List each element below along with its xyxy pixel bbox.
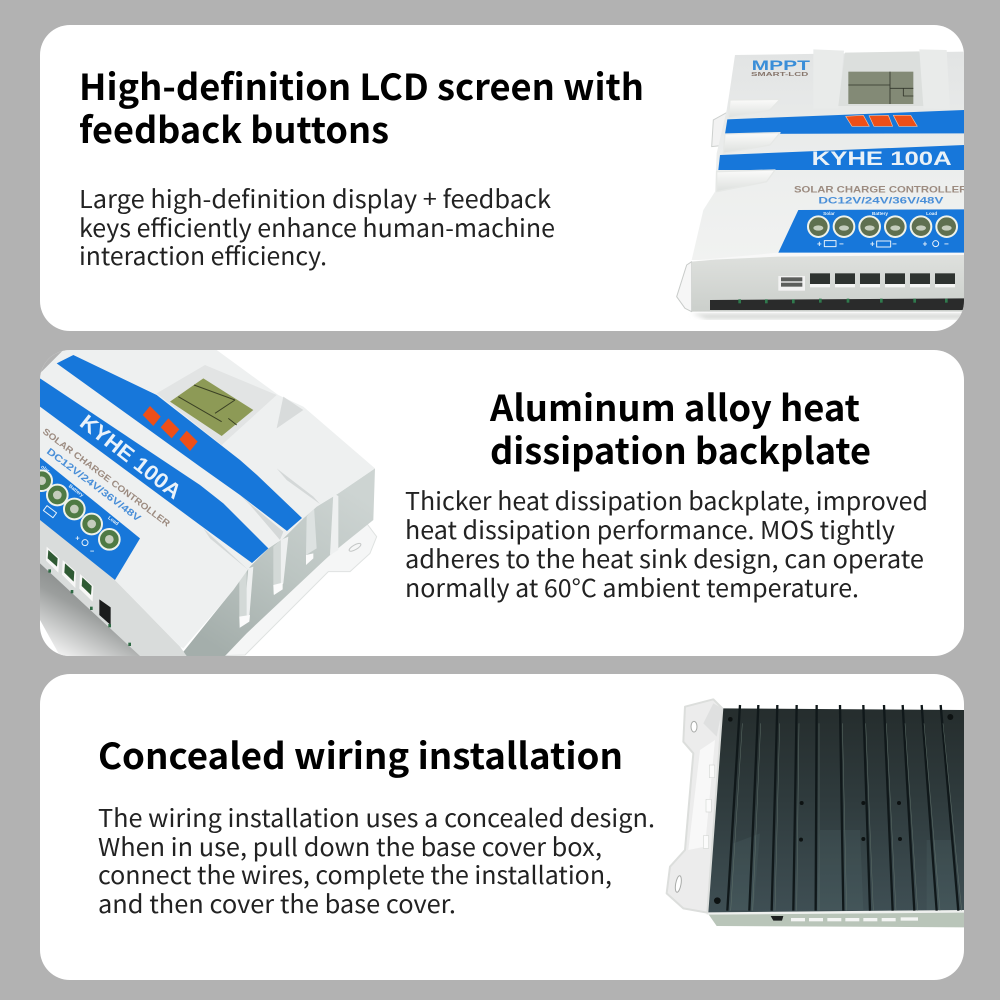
terminal panel: Battery: [872, 211, 888, 216]
orange buttons: [143, 406, 198, 451]
terminal panel: Battery: [67, 483, 85, 499]
terminal panel: olar: [39, 464, 50, 474]
logo: MPPT: [752, 57, 811, 73]
text block: heat description: heat dissipation performance. MOS tightly: [405, 512, 895, 547]
blue band lower: [718, 145, 965, 170]
text block: LCD description: Large high-definition display + feedback: [79, 181, 551, 216]
terminal panel: +: [75, 534, 80, 543]
blue band lower: [40, 378, 268, 563]
text block: heat description: normally at 60°C ambient temperature.: [405, 570, 859, 605]
port face: [40, 518, 187, 656]
terminal panel: [31, 457, 140, 580]
heading: LCD screen: feedback buttons: [79, 102, 389, 154]
terminal panel: Load: [926, 211, 937, 216]
shadow under port face: [40, 560, 143, 656]
mounting flange: [225, 524, 378, 656]
product label: DC12V/24V/36V/48V: [44, 446, 143, 525]
keyhole: [348, 542, 362, 552]
terminal panel: +: [923, 239, 928, 248]
panel: concealed wiring: [40, 674, 965, 980]
blue band upper: [57, 355, 302, 531]
product label: SOLAR CHARGE CONTROLLER: [41, 426, 172, 529]
model name: KYHE 100A: [75, 410, 186, 504]
terminal panel: −: [839, 239, 844, 248]
ports row: [46, 547, 131, 646]
product label: [794, 186, 964, 204]
LCD bezel and display: [157, 365, 277, 445]
text block: LCD description: keys efficiently enhance human-machine: [79, 210, 555, 245]
blue band upper: [725, 110, 965, 134]
terminal panel: Load: [106, 515, 120, 527]
heading: heat dissipation: Aluminum alloy heat: [489, 380, 860, 432]
terminal panel: −: [892, 239, 897, 248]
text block: wiring description: When in use, pull down the base cover box,: [98, 829, 602, 864]
bottom edge with slots: [707, 910, 965, 927]
heading: LCD screen: High-definition LCD screen with: [79, 59, 644, 111]
text block: LCD description: [79, 181, 555, 273]
screw holes: [714, 714, 953, 904]
text block: wiring description: [98, 800, 655, 921]
heat sink fins: [727, 705, 962, 911]
logo: SMART-LCD: [751, 72, 808, 78]
text block: wiring description: The wiring installation uses a concealed design.: [98, 800, 655, 835]
heading: heat dissipation: dissipation backplate: [490, 423, 871, 475]
terminal panel: +: [870, 239, 875, 248]
heat sink plate: [707, 708, 965, 912]
heading: heat dissipation: [489, 380, 871, 475]
ports row: [778, 273, 955, 291]
text block: LCD description: interaction efficiency.: [79, 238, 327, 273]
product label: DC12V/24V/36V/48V: [818, 196, 944, 206]
text block: heat description: adheres to the heat sink design, can operate: [405, 541, 924, 576]
terminal panel: +: [817, 239, 822, 248]
heading: concealed wiring: Concealed wiring installation: [98, 728, 623, 780]
LCD bezel and display: [838, 51, 923, 106]
heading: LCD screen: [79, 59, 644, 154]
model name: KYHE 100A: [812, 149, 952, 170]
text block: wiring description: and then cover the base cover.: [98, 886, 456, 921]
terminal panel: [778, 209, 965, 253]
terminal panel: −: [90, 546, 94, 555]
text block: heat description: Thicker heat dissipation backplate, improved: [405, 483, 928, 518]
logo: [751, 60, 810, 76]
product label: SOLAR CHARGE CONTROLLER: [794, 184, 968, 194]
product image: controller front view: [677, 49, 968, 319]
panel: heat dissipation: [31, 350, 964, 656]
panel: LCD screen: [40, 25, 968, 331]
terminal panel: Solar: [823, 211, 835, 216]
terminal panel: −: [944, 239, 949, 248]
product image: controller angled view: [31, 350, 377, 656]
white mounting bracket: [667, 699, 722, 913]
orange buttons: [846, 115, 917, 126]
side fins: [180, 468, 375, 656]
text block: wiring description: connect the wires, complete the installation,: [98, 857, 612, 892]
text block: heat description: [405, 483, 928, 605]
product image: controller back view: [667, 699, 965, 927]
